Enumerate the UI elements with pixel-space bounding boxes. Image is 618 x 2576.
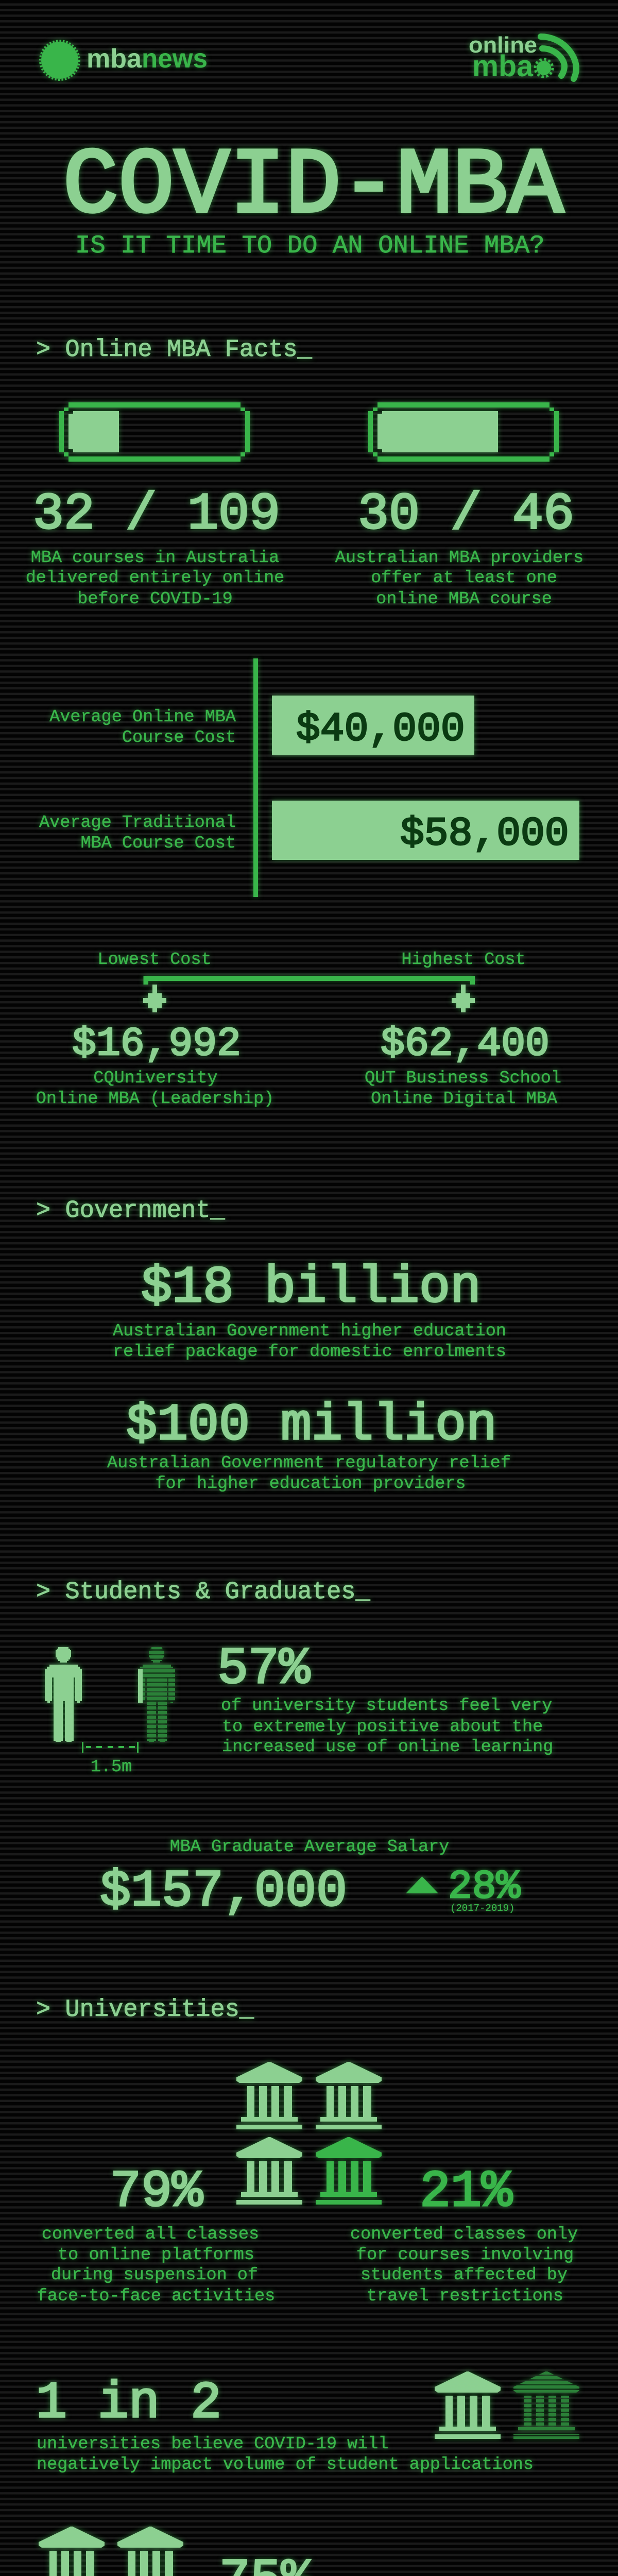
marker: highest: [452, 985, 475, 1012]
section heading: Government: > Government_: [36, 1197, 225, 1225]
bar: traditional cost: [272, 801, 579, 860]
label: traditional cost: [39, 813, 236, 853]
section heading: Online MBA Facts: > Online MBA Facts_: [36, 336, 313, 364]
text: students feel positive: of university students feel very: [221, 1696, 552, 1716]
section heading: Students and Graduates: > Students & Graduates_: [36, 1579, 371, 1606]
panel: online MBA facts: [26, 402, 583, 609]
subtitle: IS IT TIME TO DO AN ONLINE MBA?: [75, 231, 545, 260]
provider: highest: [365, 1069, 561, 1109]
stat: 57%: 57%: [217, 1640, 311, 1699]
stat: 32 / 109: 32 / 109: [33, 486, 280, 544]
text: relief package: Australian Government higher education: [113, 1321, 506, 1341]
text: converted all classes: to online platforms: [58, 2245, 254, 2265]
text: converted classes only: converted classes only: [350, 2225, 578, 2244]
stat: 30 / 46: 30 / 46: [358, 486, 574, 544]
caption: providers offering online: online MBA course: [376, 589, 552, 609]
text: converted classes only: for courses involving: [356, 2245, 574, 2265]
text: converted all classes: during suspension of: [51, 2265, 258, 2285]
value: lowest: $16,992: [72, 1022, 241, 1067]
stat: 21%: 21%: [420, 2163, 513, 2222]
logo: mbanews: [40, 41, 208, 80]
text: converted classes only: students affected by: [360, 2265, 568, 2285]
battery: 30 of 46: [368, 402, 559, 462]
text: students feel positive: to extremely positive about the: [222, 1717, 543, 1737]
text: negative impact: negatively impact volume of student applications: [37, 2455, 534, 2475]
label: lowest cost: Lowest Cost: [97, 950, 212, 970]
bar: online cost: $40,000: [296, 707, 465, 752]
text: converted classes only: travel restrictions: [367, 2286, 563, 2306]
icon group: four universities 79 / 21: [236, 2062, 382, 2205]
note: years: (2017-2019): [450, 1903, 514, 1914]
icon: up arrow: [406, 1876, 438, 1893]
caption: courses delivered online: delivered entirely online: [26, 568, 284, 588]
logo: online mba: [469, 32, 576, 83]
stat: 28%: 28%: [448, 1865, 521, 1910]
text: regulatory relief: Australian Government regulatory relief: [107, 1453, 511, 1473]
dimension marker: 1.5m: [82, 1742, 139, 1777]
stat: 1 in 2: 1 in 2: [36, 2375, 221, 2433]
title: COVID-MBA: [63, 134, 563, 240]
provider: lowest: CQUniversity: [93, 1069, 218, 1088]
label: online cost: Average Online MBA: [49, 707, 236, 727]
label: online cost: Course Cost: [122, 728, 236, 748]
text: relief package: [113, 1321, 506, 1362]
text: converted all classes: face-to-face activities: [37, 2286, 275, 2306]
text: regulatory relief: for higher education providers: [155, 1474, 466, 1494]
logo: mbanews: news: [142, 44, 208, 74]
section heading: Universities: > Universities_: [36, 1996, 254, 2024]
stat: salary: $157,000: [100, 1863, 347, 1921]
icon: two people distanced: [45, 1647, 175, 1742]
caption: providers offering online: [335, 548, 583, 609]
label: online cost: [49, 707, 236, 748]
text: converted all classes: converted all classes: [42, 2225, 259, 2244]
provider: highest: QUT Business School: [365, 1069, 561, 1088]
panel: cost range: [36, 950, 561, 1109]
text: negative impact: universities believe COVID-19 will: [37, 2434, 389, 2454]
label: traditional cost: Average Traditional: [39, 813, 236, 833]
logo: online mba: online: [469, 32, 537, 58]
icon group: 75% universities: [39, 2527, 183, 2576]
caption: courses delivered online: MBA courses in Australia: [31, 548, 279, 568]
logo: mbanews: mba: [87, 44, 142, 74]
label: highest cost: Highest Cost: [401, 950, 526, 970]
battery: 32 of 109: [59, 402, 250, 462]
value: highest: $62,400: [381, 1022, 550, 1067]
bar chart: average course cost: [39, 658, 579, 897]
caption: courses delivered online: [26, 548, 284, 609]
provider: highest: Online Digital MBA: [371, 1089, 558, 1109]
stat: $18 billion: $18 billion: [141, 1259, 481, 1317]
icon group: one in two universities: [435, 2371, 579, 2439]
label: traditional cost: MBA Course Cost: [80, 834, 236, 853]
bracket: [143, 976, 475, 985]
provider: lowest: Online MBA (Leadership): [36, 1089, 274, 1109]
text: students feel positive: [221, 1696, 553, 1757]
stat: $100 million: $100 million: [126, 1397, 497, 1455]
text: relief package: relief package for domestic enrolments: [113, 1342, 506, 1362]
label: average salary: MBA Graduate Average Salary: [170, 1837, 449, 1857]
text: converted classes only: [350, 2225, 578, 2306]
bar: online cost: [272, 696, 474, 755]
text: negative impact: [37, 2434, 534, 2475]
text: converted all classes: [37, 2225, 275, 2306]
text: regulatory relief: [107, 1453, 511, 1494]
dimension marker: 1.5m: 1.5m: [91, 1757, 132, 1777]
text: students feel positive: increased use of online learning: [222, 1737, 553, 1757]
stat: 79%: 79%: [110, 2163, 203, 2222]
provider: lowest: [36, 1069, 274, 1109]
marker: lowest: [143, 985, 166, 1012]
axis: [253, 658, 258, 897]
caption: providers offering online: Australian MBA providers: [335, 548, 583, 568]
caption: courses delivered online: before COVID-19: [77, 589, 233, 609]
bar: traditional cost: $58,000: [400, 811, 569, 857]
logo: online mba: mba: [472, 49, 534, 83]
caption: providers offering online: offer at least one: [371, 568, 557, 588]
